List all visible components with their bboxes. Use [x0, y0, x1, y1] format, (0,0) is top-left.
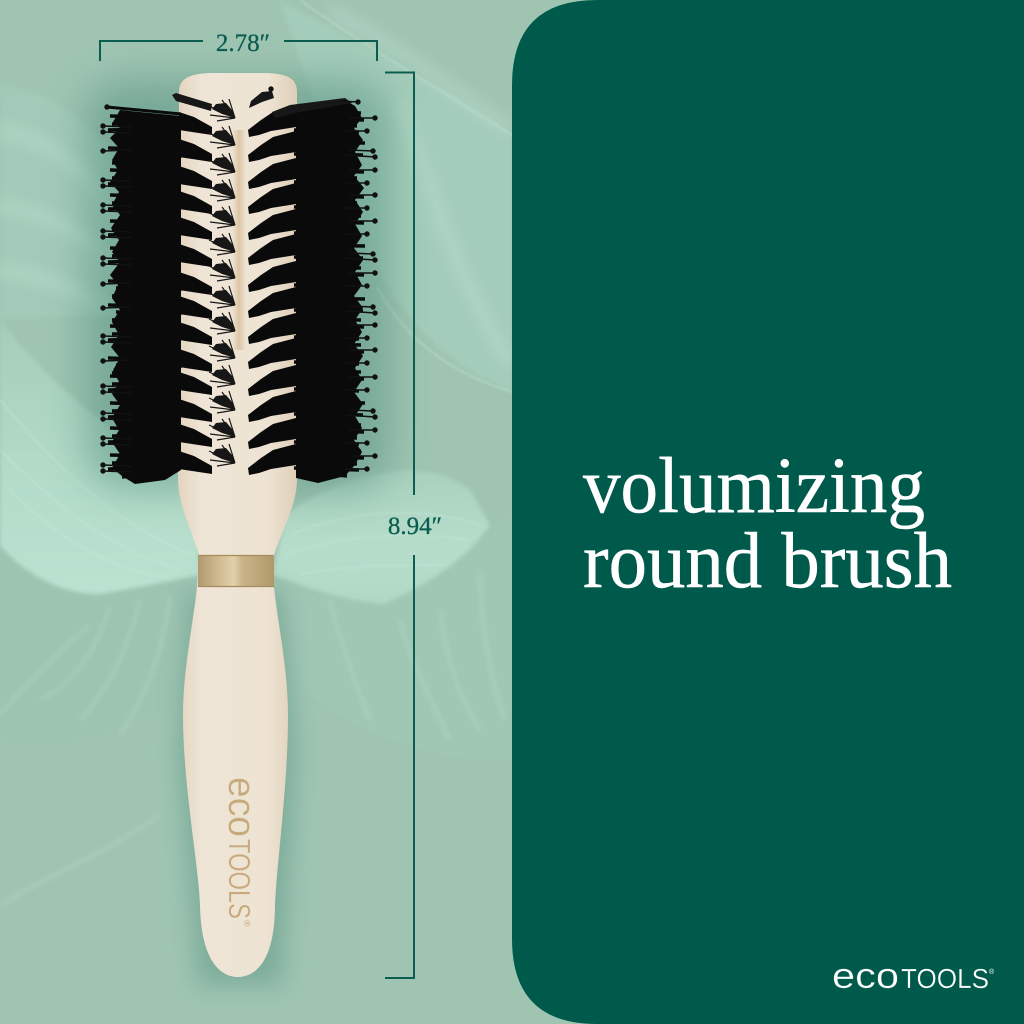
handle logo: TOOLS: [222, 839, 257, 919]
bristles right mass: [296, 100, 364, 483]
right panel: [512, 0, 1024, 1024]
height label: 8.94″: [388, 513, 442, 540]
handle logo: eco: [220, 777, 262, 837]
heading: [583, 443, 952, 605]
width label: 2.78″: [216, 30, 270, 57]
bristles top centre tuft: [249, 86, 274, 108]
bristles right top row: [272, 98, 361, 118]
centre tufts: [209, 99, 235, 466]
bristles left rows: [100, 112, 212, 477]
heading: round brush: [583, 518, 952, 605]
height dimension bracket: [385, 72, 442, 978]
brand logo: TOOLS: [901, 963, 989, 994]
brand logo: ®: [989, 968, 995, 976]
brush head and handle wood: [178, 73, 297, 977]
brush drop shadow: [85, 80, 390, 985]
bristles left top row: [104, 93, 212, 114]
wood centre grain streak: [232, 130, 246, 350]
bristles right rows: [248, 106, 378, 476]
heading: volumizing: [583, 443, 925, 530]
bristles left mass: [110, 110, 181, 484]
gold ring: [198, 555, 274, 587]
width dimension bracket: [100, 30, 377, 61]
handle logo: ®: [242, 920, 252, 927]
brand logo: eco: [832, 955, 899, 996]
brush: [100, 73, 378, 977]
